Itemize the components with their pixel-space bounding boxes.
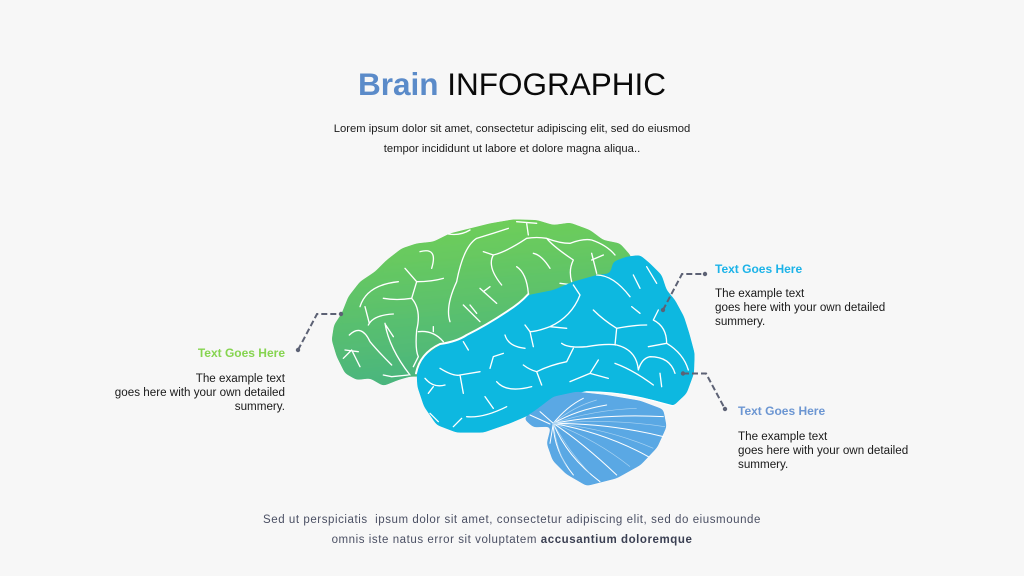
callout: left [115, 346, 285, 413]
footer text [263, 514, 761, 546]
connector: upper right [661, 272, 707, 312]
callout heading: lower right: Text Goes Here [738, 404, 825, 418]
callout body: upper right: The example text [715, 287, 804, 300]
callout body: lower right: The example text [738, 430, 827, 443]
callout body: lower right: goes here with your own detailed [738, 444, 908, 457]
callout body: lower right [738, 430, 908, 471]
callout: upper right [715, 262, 885, 328]
intro text: tempor incididunt ut labore et dolore magna aliqua.. [384, 143, 640, 155]
brain: blue lower lobe [416, 255, 695, 433]
callout heading: left: Text Goes Here [198, 346, 285, 360]
callout: lower right [738, 404, 908, 471]
footer text: Sed ut perspiciatis ipsum dolor sit amet, consectetur adipiscing elit, sed do eiusmounde [263, 514, 761, 526]
callout body: left: summery. [235, 400, 285, 413]
footer text: omnis iste natus error sit voluptatem accusantium doloremque [332, 534, 692, 546]
connector: lower right [681, 371, 727, 411]
intro text: Lorem ipsum dolor sit amet, consectetur adipiscing elit, sed do eiusmod [334, 123, 690, 135]
brain: green upper lobe [332, 219, 632, 386]
callout body: lower right: summery. [738, 458, 788, 471]
connector: left [296, 312, 343, 352]
intro text [334, 123, 690, 155]
brain: cerebellum [523, 392, 667, 486]
brain illustration [332, 219, 695, 486]
callout body: left: goes here with your own detailed [115, 386, 285, 399]
callout body: upper right [715, 287, 885, 328]
callout heading: upper right: Text Goes Here [715, 262, 802, 276]
callout body: upper right: goes here with your own detailed [715, 301, 885, 314]
callout body: upper right: summery. [715, 315, 765, 328]
callout body: left: The example text [196, 372, 285, 385]
callout body: left [115, 372, 285, 413]
title: Brain INFOGRAPHIC [358, 66, 666, 102]
